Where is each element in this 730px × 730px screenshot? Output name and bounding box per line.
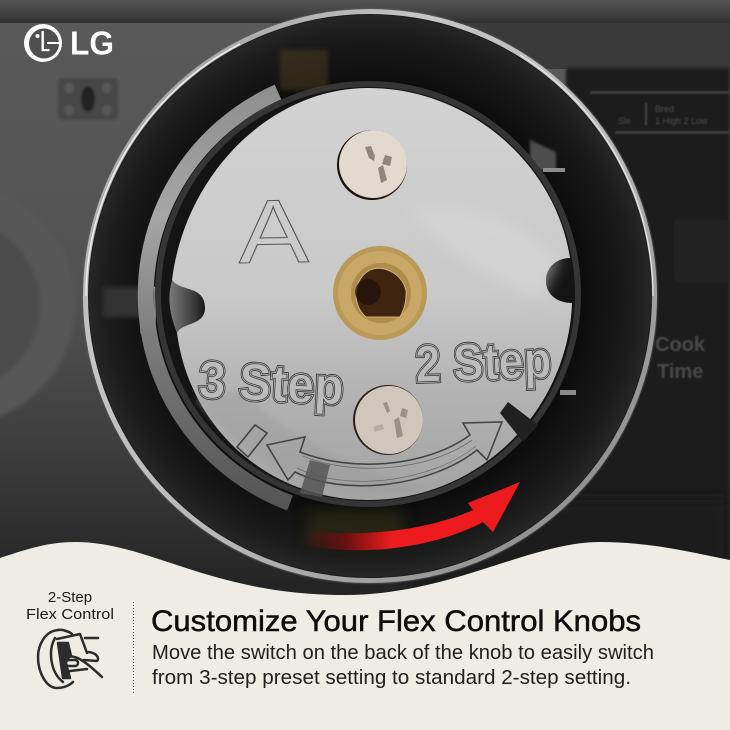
icon: knob switch [38,630,102,688]
metal plate [169,88,572,500]
switch tab: 3 Step side [300,460,330,497]
blurred control panel text: Cook [655,334,706,356]
embossed label: 2 Step: 2 Step [414,331,552,394]
embossed letter A: A [238,182,309,283]
blurred control panel text: 1 High 2 Low [655,116,708,126]
top screw [337,130,407,200]
inner light ring and dark ring [146,84,578,504]
embossed double arrow [237,422,502,486]
embossed label: 3 Step: 3 Step [197,351,345,417]
body text [152,642,654,689]
feature label: Flex Control [26,606,114,623]
embossed label: 2 Step: 2 Step [414,331,552,394]
body text: Move the switch on the back of the knob to easily switch [152,642,654,664]
blurred control panel text: Bred [655,104,674,114]
embossed label: 3 Step: 3 Step [197,351,345,417]
centre brass bushing [333,246,427,340]
switch tab: 2 Step side [500,402,538,442]
blurred control panel text [590,91,730,383]
logo wordmark: LG [70,24,114,62]
knob outer rim [83,9,657,583]
inner tabs and brass glow [103,50,576,544]
logo symbol [24,24,62,62]
bottom screw [353,385,423,455]
feature label: 2-Step [48,589,92,606]
red direction arrow [305,482,520,550]
blurred control panel text: Sle [618,116,631,126]
body text: from 3-step preset setting to standard 2-step setting. [152,667,631,689]
blurred control panel text: Time [657,361,703,383]
embossed label: 3 Step: 3 Step [197,351,345,417]
feature label [26,589,114,623]
blurred dial at left [0,185,75,425]
blurred button at top left [58,78,118,120]
dotted divider [132,602,134,693]
LG logo [24,24,114,62]
cream wave panel [0,542,730,730]
embossed label: 2 Step: 2 Step [414,331,552,394]
heading: Customize Your Flex Control Knobs [151,605,641,638]
